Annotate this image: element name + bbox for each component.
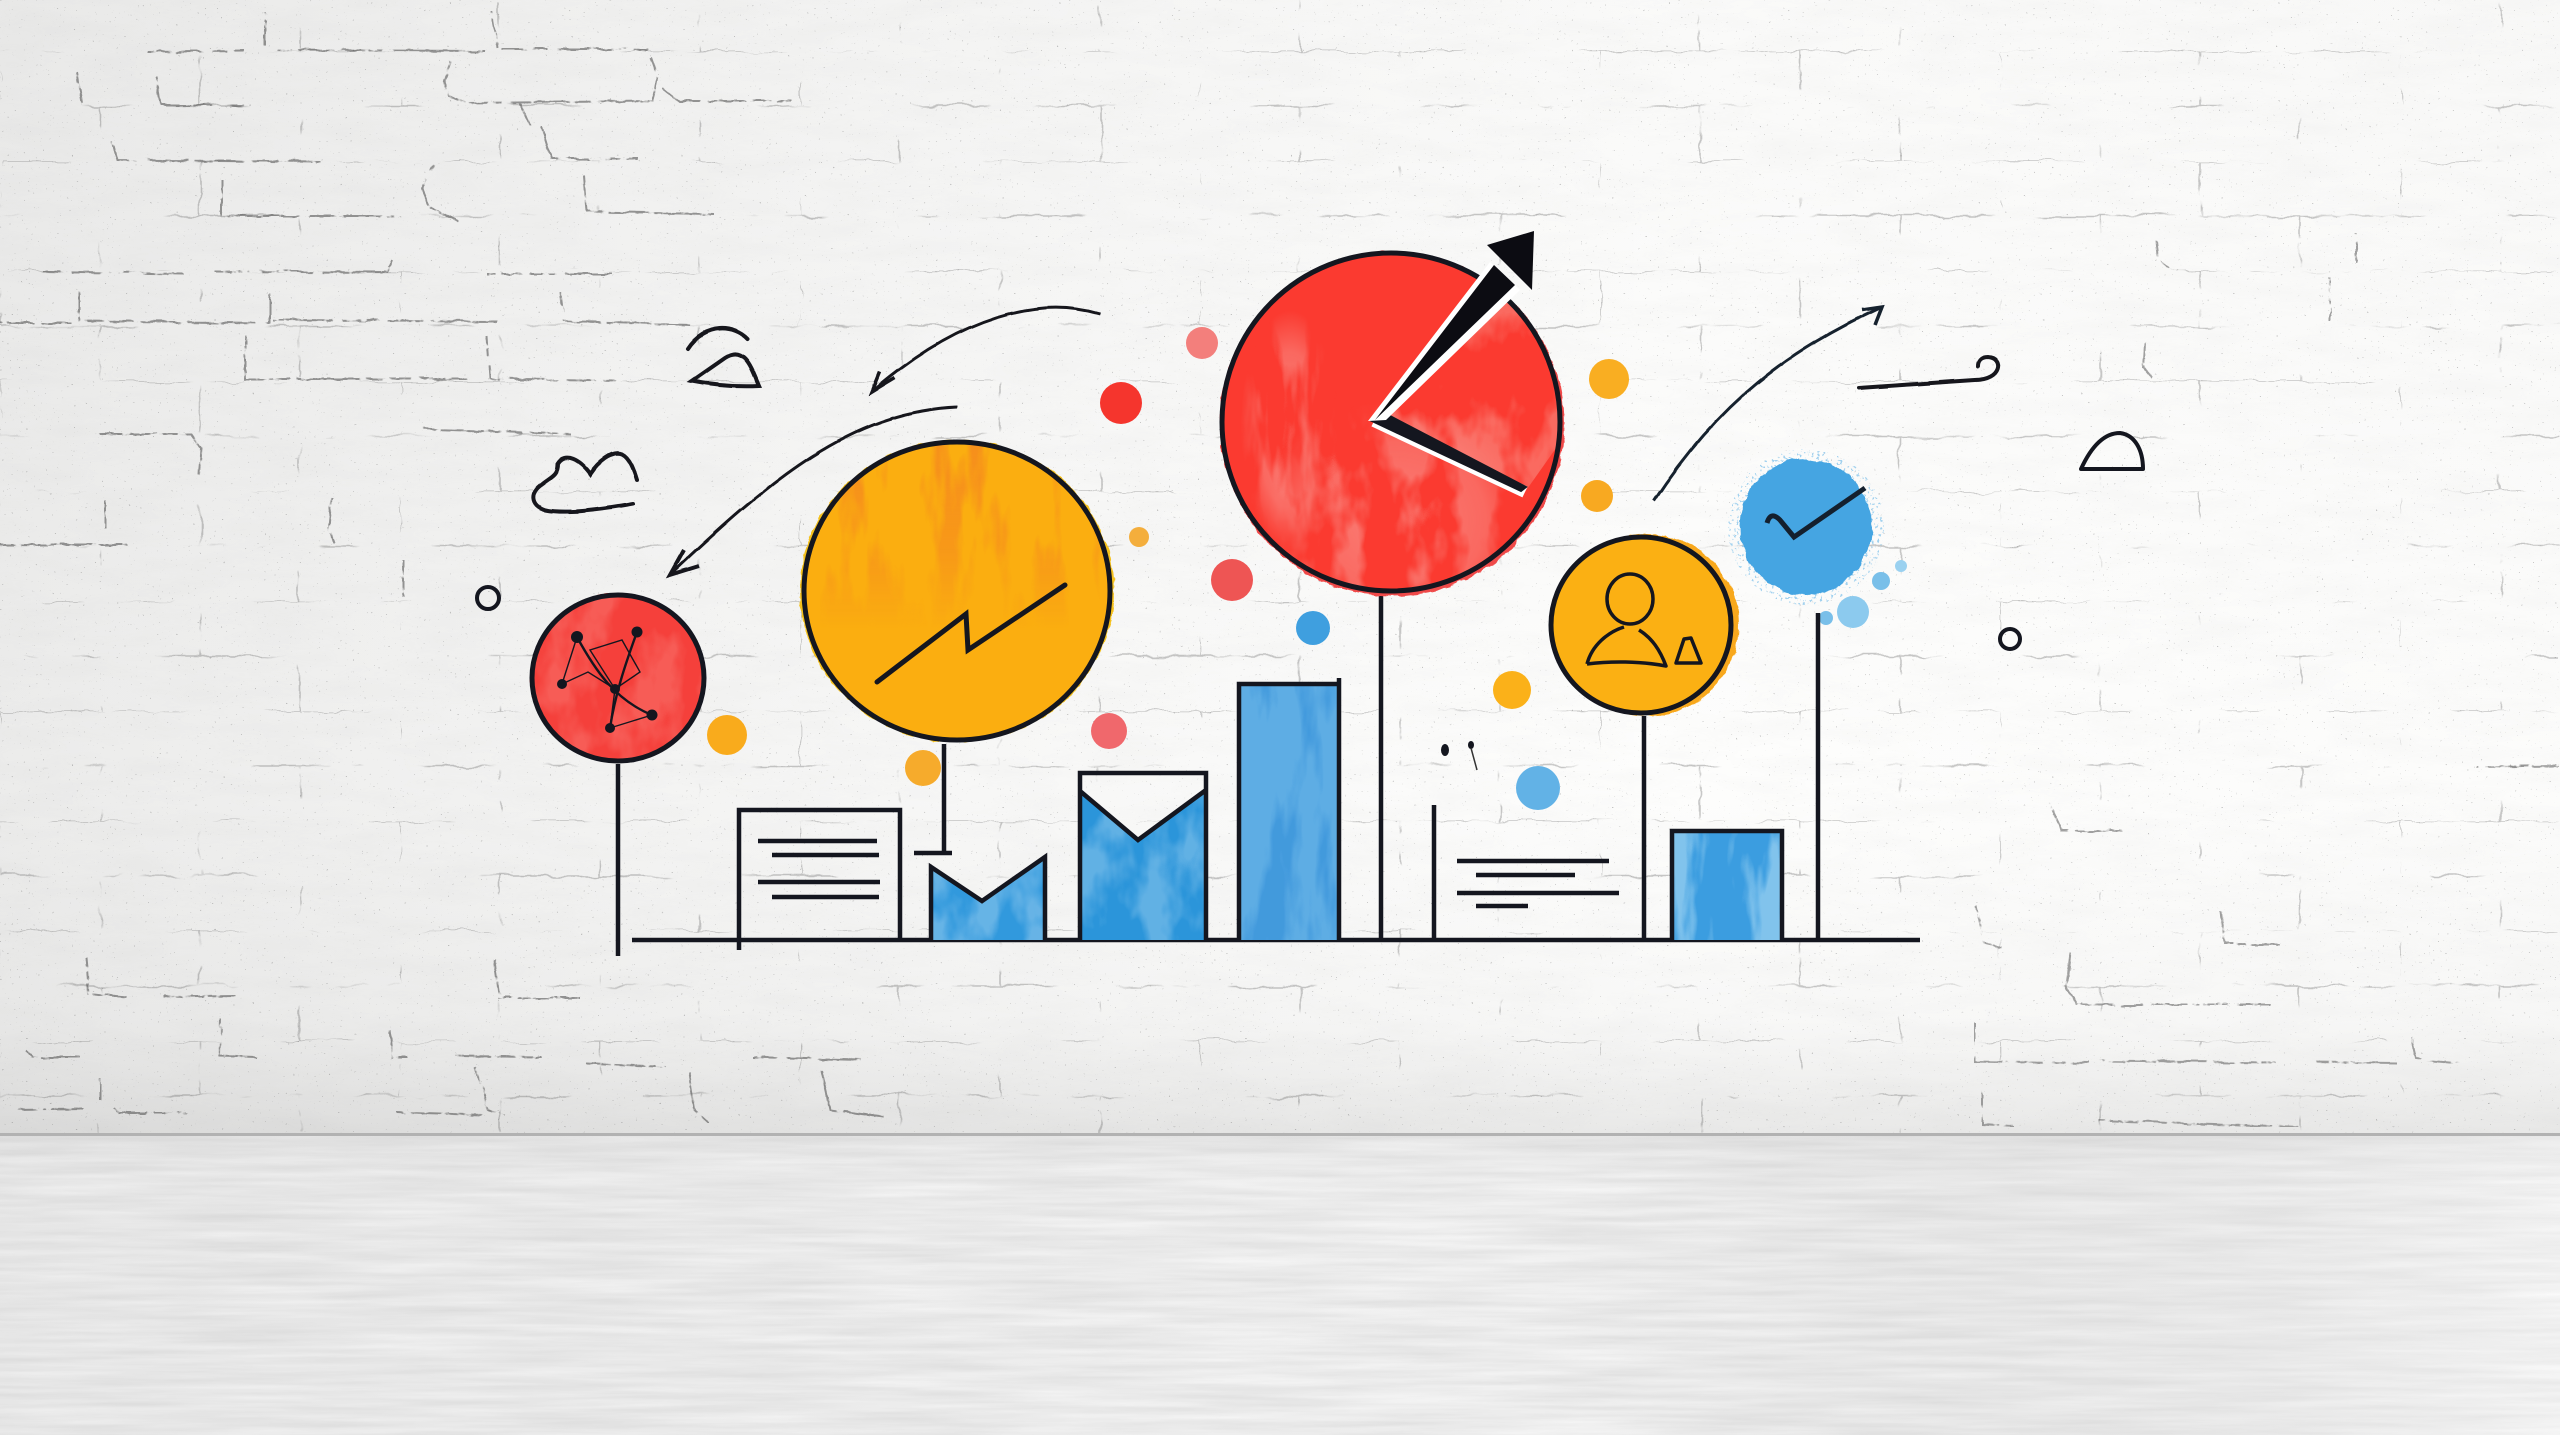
icon: pie slice hand [1372, 415, 1526, 491]
doodle: small ring left [477, 587, 499, 609]
paint dots scattered around the chart [707, 327, 1907, 810]
small blue notch bar [930, 857, 1045, 940]
medium blue notch bar [1080, 773, 1206, 940]
large red pie circle with arrow hands [1220, 231, 1565, 597]
tall blue bar [1239, 678, 1339, 940]
doodle: dome right [2081, 433, 2143, 469]
doodle: cloud [533, 453, 637, 512]
arrow: curved up right [1654, 307, 1882, 501]
small red circle with network icon [531, 594, 705, 762]
arrow: lower curved left [670, 407, 957, 575]
icon: pie hand white edge [1374, 421, 1525, 492]
text lines right [1457, 861, 1619, 906]
icon: person [1587, 574, 1701, 666]
background: white brick wall [0, 0, 2560, 1134]
large yellow circle with zigzag trend [800, 440, 1114, 742]
ink specks near right text lines [1441, 741, 1477, 770]
icon: check mark [1767, 488, 1865, 537]
doodle: dome with arc [688, 328, 759, 386]
icon: arrow needle [1368, 231, 1534, 421]
icon: network nodes [557, 626, 658, 733]
chart baseline and stems [618, 596, 1920, 956]
doodle: small ring right [2000, 629, 2020, 649]
blue circle with check mark [1728, 449, 1884, 605]
doodle: hook line [1859, 357, 1998, 388]
small blue bar [1672, 831, 1782, 940]
arrow: upper curved left [872, 308, 1100, 392]
icon: zigzag line [877, 585, 1065, 682]
document card left [739, 810, 900, 950]
medium yellow circle with person icon [1551, 534, 1739, 716]
floor: whitewashed wood [0, 1133, 2560, 1435]
